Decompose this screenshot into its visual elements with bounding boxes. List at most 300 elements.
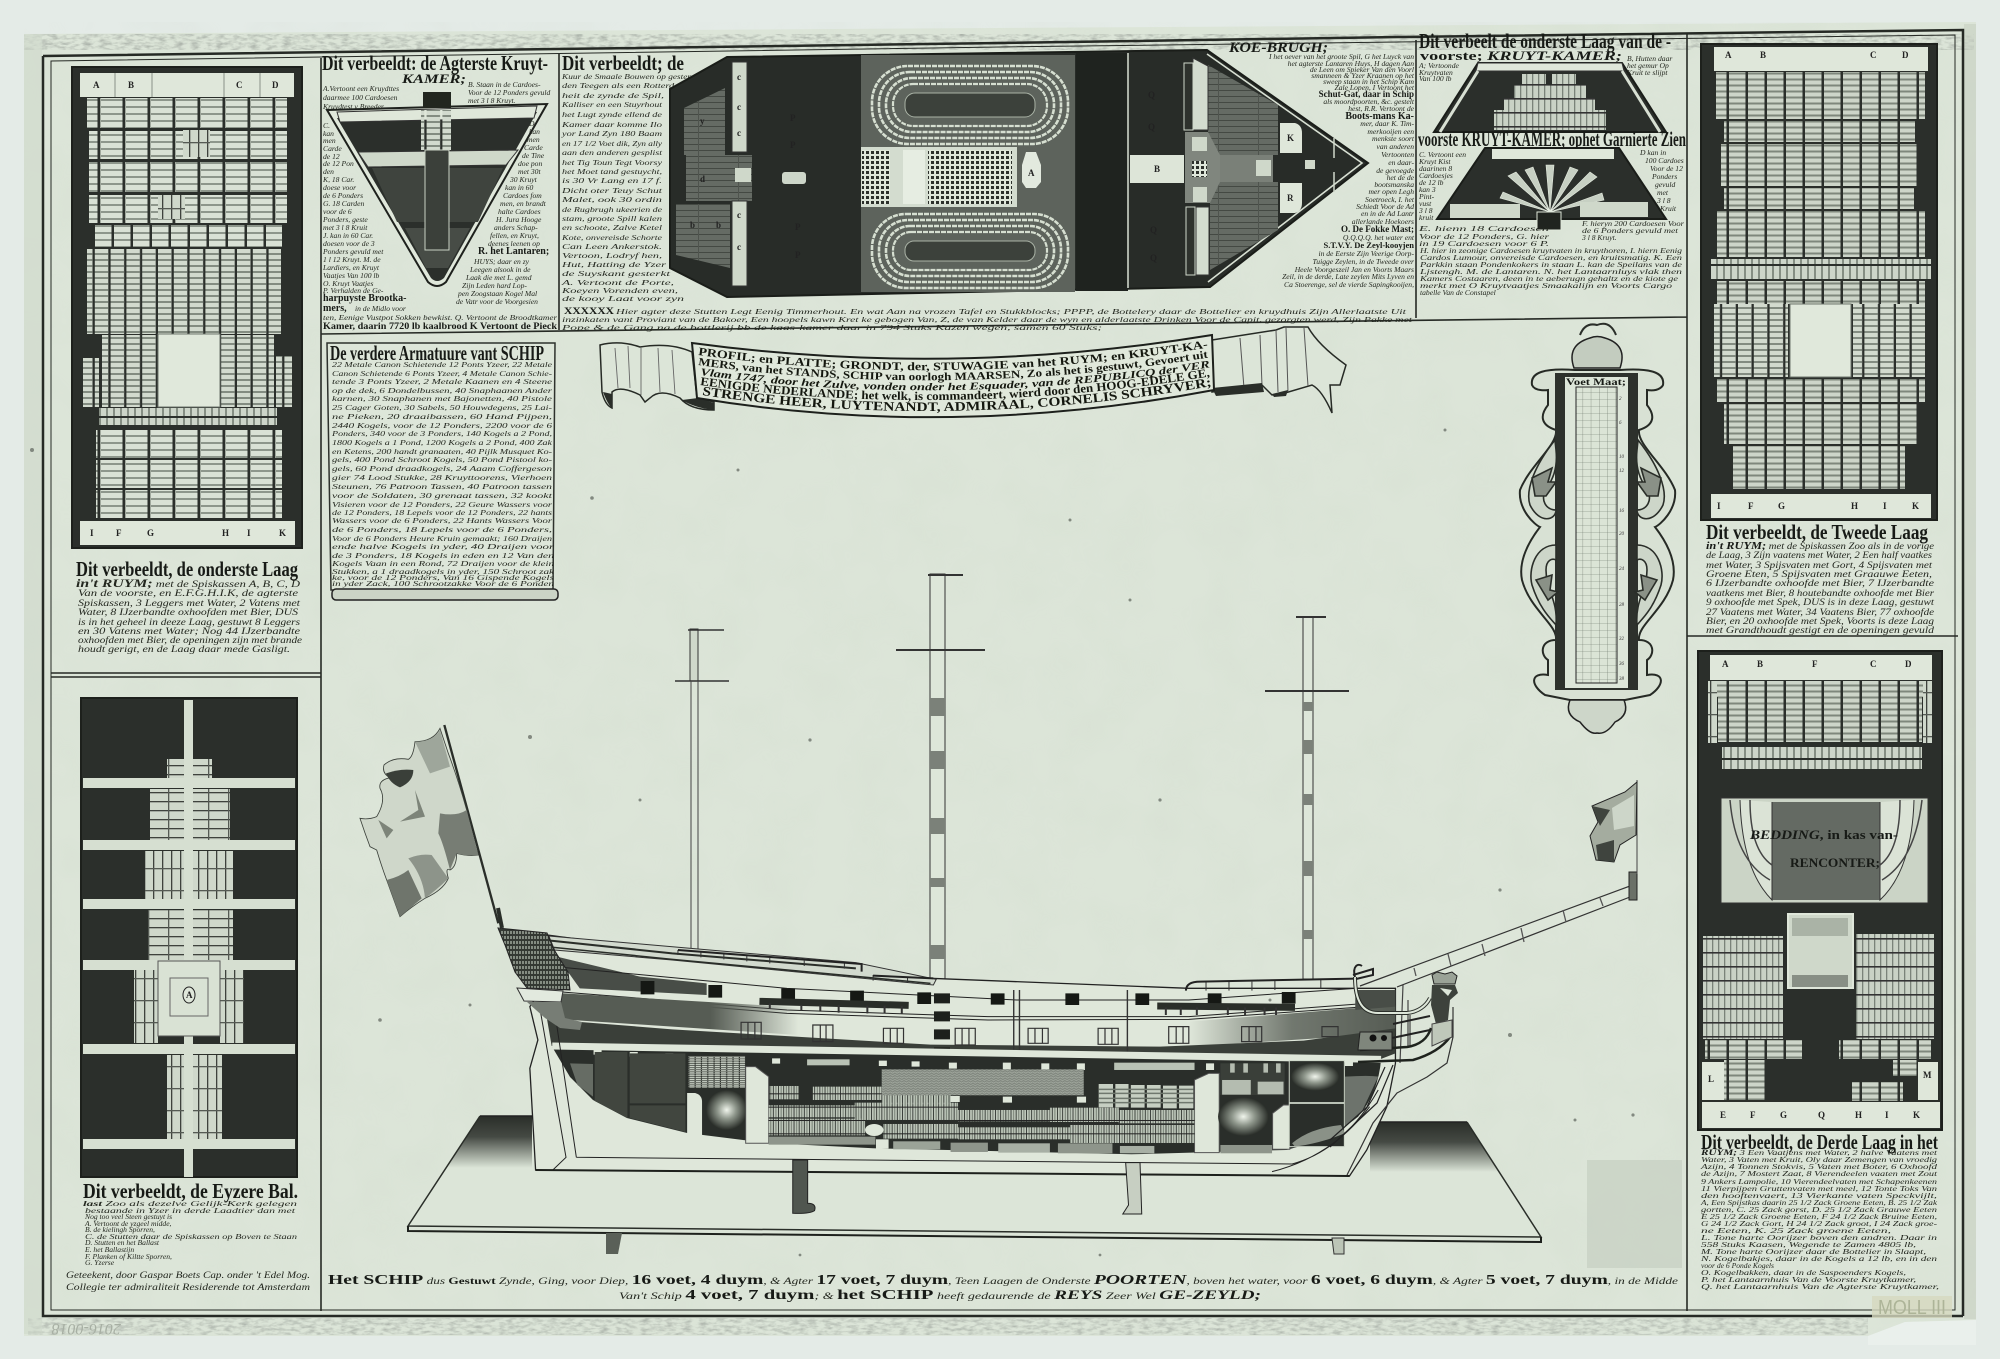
heading and text: Koe-brugh: Q.Q.Q.Q. het water ent	[1343, 233, 1415, 242]
header casks	[1710, 655, 1932, 680]
cross beams	[83, 783, 295, 1144]
left column text: met 3 l 8 Kruit	[323, 223, 368, 232]
ballast stones	[134, 759, 244, 1143]
left column text: mers,	[323, 303, 347, 314]
text block: lower layer caption: is in het geheel in deeze Laag, gestuwt 8 Leggers	[78, 618, 300, 628]
panel: further text under hull plan intro: de Rugbrugh ukeerien de	[562, 205, 663, 214]
text block: second layer caption: 6 IJzerbandte oxhoofde met Bier, 7 IJzerbandte	[1706, 578, 1934, 589]
mast partner ladder	[934, 993, 950, 1057]
left scroll fold	[600, 343, 714, 410]
left column text: de 12	[323, 152, 340, 161]
text block: lower layer caption: Dit verbeeldt, de onderste Laag	[76, 557, 298, 581]
text block: notes below hull plan: XXXXXX	[564, 306, 615, 316]
text block: third layer caption: de Azijn, 7 Mostert Zaat, 8 Vierendeelen vaaten met Zout	[1701, 1169, 1938, 1178]
footer casks: F	[1748, 501, 1754, 511]
text block: lower layer caption: Spiskassen, 3 Leggers met Water, 2 Vatens met	[78, 599, 300, 609]
chain plates	[770, 1003, 1276, 1015]
scale numbers: 28	[1619, 603, 1624, 608]
text block: third layer caption: N. Kogelbakjes, daar in de Kogels a 12 lb, en in den	[1700, 1254, 1937, 1263]
signature: Geteekent, door Gaspar Boets Cap. onder 't Edel Mog.	[66, 1271, 310, 1281]
panel: further text under hull plan intro: Kamer daar komme Ilo	[561, 120, 662, 129]
hull section diagram	[327, 92, 547, 286]
footer casks: F	[1750, 1110, 1756, 1120]
text block: second layer caption: 27 Vaatens met Water, 34 Vaatens Bier, 77 oxhoofde	[1706, 607, 1934, 618]
footer casks: I	[90, 528, 94, 538]
powder room notes: Pint-	[1418, 192, 1435, 201]
torn corner	[1868, 1320, 1976, 1345]
footer casks: I	[247, 528, 251, 538]
text block: third layer caption: 9 Ankers Lampolie, 10 Vierendeelvaten met Schapenkeenen	[1701, 1177, 1937, 1186]
text block: notes below hull plan: Pope & de Gang na de bottlerij bb de kaas-kamer daar in 794 Stuks Kazen wegen, samen 60 Stuks;	[560, 323, 1103, 332]
left column text: men	[323, 136, 336, 145]
left column text: P. Verhalden de Ge-	[322, 286, 384, 295]
powder room notes: Cardoesjes	[1419, 171, 1453, 180]
left column text: doese voor	[323, 183, 356, 192]
right column text: men, en brandt	[500, 199, 547, 208]
ribbon title lines: STRENGE HEER, LUYTENANDT, ADMIRAAL, CORNELIS SCHRYVER;	[702, 379, 1210, 413]
header casks: D	[272, 80, 279, 90]
text block: second layer caption	[1706, 520, 1934, 636]
panel: further text under hull plan intro: Dit verbeeldt; de	[562, 51, 684, 75]
left column text: Ponders, geste	[322, 215, 368, 224]
right column text: doe pon	[518, 159, 542, 168]
right column text: de Vatr voor de Voorgesien	[456, 297, 538, 306]
fore mast	[1265, 617, 1349, 979]
text block: second layer caption: Groene Eten, 5 Spijsvaten met Graauwe Eeten,	[1706, 570, 1932, 580]
stern cabins: c	[737, 72, 741, 82]
left column text	[322, 121, 406, 314]
ribbon title lines: Vlam 1747, door het Zulve, vonden onder het Esquader, van de REPUBLICQ der VER	[702, 361, 1210, 392]
panel: further text under hull plan intro: Malet, ook 30 ordin	[560, 195, 662, 204]
panel: further text under hull plan intro: Can Leen Ankerstok.	[562, 242, 662, 251]
stern stores	[570, 1052, 745, 1135]
heading and text: Koe-brugh: Boots-mans Ka-	[1345, 111, 1414, 122]
stern cabins: b	[690, 220, 695, 230]
text block: notes below hull plan	[560, 306, 1413, 332]
heading and text: Koe-brugh: hest, R.R. Vertoont de	[1348, 104, 1415, 113]
heading and text: Koe-brugh: Schiedt Voor de Ad	[1356, 202, 1414, 211]
provision casks	[1703, 934, 1934, 1101]
heading	[1419, 29, 1671, 63]
bedding curtain	[1721, 798, 1928, 903]
heading and text: Koe-brugh: de gevoegde	[1376, 166, 1415, 175]
right column text: Laak die met L. gemd	[465, 273, 532, 282]
footer casks: G	[1778, 501, 1785, 511]
panel: further text under hull plan intro: stam, groote Spill kalen	[562, 214, 662, 223]
header casks: D	[1905, 659, 1912, 669]
hull wood section	[530, 935, 1395, 1176]
lower hull shading	[547, 993, 798, 1035]
left column text: doesen voor de 3	[323, 239, 375, 248]
central hatch band: A	[1028, 168, 1035, 178]
heading: voorste; KRUYT-KAMER;	[1420, 48, 1622, 63]
heading and text: Koe-brugh: Soetroeck, I. het	[1365, 195, 1415, 204]
text block: iron ballast caption: E. het Ballastijn	[84, 1245, 134, 1254]
scroll roller	[332, 589, 558, 600]
left column text: Lardiers, en Kruyt	[322, 263, 380, 272]
forward cabins: R	[1287, 193, 1294, 203]
text block: third layer caption	[1699, 1130, 1939, 1291]
panel: further text under hull plan intro: aan den anderen gesplist	[562, 148, 663, 157]
powder room notes: Voor de 12 Ponders, G. hier	[1419, 232, 1549, 241]
text block: iron ballast caption: bestaande in Yzer in derde Laadtier dan met	[85, 1206, 296, 1215]
powder room notes: vust	[1419, 199, 1432, 208]
heading and text: Koe-brugh: O. De Fokke Mast;	[1341, 224, 1414, 234]
store boxes	[1702, 1062, 1938, 1100]
forward dark hold: Q	[1150, 225, 1157, 235]
text block: notes below hull plan: Hier agter deze Stutten Legt Eenig Timmerhout. En wat Aan na vrozen Tafel en Stukkblocks; PPPP, de Bottelery daar de Bottelier en kruydhuis Zijn Allerlaatste Uit	[614, 307, 1407, 316]
panel: further text under hull plan intro: Dicht oter Teuy Schut	[560, 186, 663, 195]
beams bottom	[951, 1096, 1086, 1103]
text block: lower layer caption: en 30 Vatens met Water; Nog 44 IJzerbandte	[78, 627, 300, 637]
panel: further text under hull plan intro: en schoote, Zalve Ketel	[562, 223, 662, 232]
cask tier	[1099, 1084, 1193, 1108]
scroll text: 2440 Kogels, voor de 12 Ponders, 2200 voor de 6	[332, 421, 552, 430]
scroll text: 25 Cager Goten, 30 Sabels, 50 Houwdegens, 25 Lai-	[332, 403, 553, 412]
dark hold with pumps: P	[790, 113, 796, 123]
panel: forward powder room	[1417, 29, 1686, 297]
heading and text: Koe-brugh: als moordpoorten, &c. gestelt	[1323, 97, 1415, 106]
store boxes: M	[1923, 1070, 1932, 1080]
central hatch	[158, 334, 220, 407]
header casks: A	[1722, 659, 1729, 669]
panel: further text under hull plan intro: Koeyen Vorenden even,	[560, 286, 678, 295]
footer casks: H	[1851, 501, 1858, 511]
header casks: B	[128, 80, 134, 90]
panel: further text under hull plan intro: het Moet tand gestuycht,	[562, 167, 662, 176]
mast step: A	[186, 990, 193, 1000]
footer casks: I	[1883, 501, 1887, 511]
right column text: halte Cardoes	[498, 207, 541, 216]
text block: notes below hull plan: inzinkaten vant Proviant van de Bakoer, Een hoopels kawn Kret ke gebogen Van, Z, de van Kelder daar de wyn en alderlaatste Drinken Voor de Capit. gezorgten werd, Zijn Pakke met	[562, 315, 1413, 324]
heading and text: Koe-brugh: en in de Ad Lantr	[1361, 209, 1414, 218]
forward dark hold: Q	[1150, 253, 1157, 263]
powder room notes: Kamers Costaaren, deen in te aeberugn gehaltz en de kiote ge	[1419, 274, 1679, 283]
powder kegs trapezoid	[1434, 63, 1666, 132]
right column text: Cardoes fom	[503, 191, 542, 200]
left column text: de 12 Pon	[323, 159, 354, 168]
scale numbers: 2	[1619, 397, 1622, 402]
heading and text: Koe-brugh: Vertoonten	[1381, 150, 1414, 159]
bottom caption line 1: Het SCHIP dus Gestuwt Zynde, Ging, voor Diep, 16 voet, 4 duym , & Agter 17 voet, 7 duym , Teen Laagen de Onderste POORTEN , boven het water, voor 6 voet, 6 duym , & Agter 5 voet, 7 duym , in de Midde	[328, 1273, 1678, 1288]
right column text: H. Jura Hooge	[495, 215, 542, 224]
ribbon body	[692, 335, 1214, 417]
ship bow and figurehead	[1330, 780, 1637, 1175]
bow flag	[1590, 782, 1637, 862]
left column text: den	[323, 167, 334, 176]
text block: lower layer caption	[76, 557, 302, 655]
footer casks: H	[222, 528, 229, 538]
heading: Dit verbeelt de onderste Laag van de -	[1419, 29, 1671, 53]
powder room notes: Voor de 12	[1650, 164, 1683, 173]
mast step	[158, 961, 220, 1036]
scroll text: Stukken, a 1 draadkogels in yder, 150 Schroot zak	[332, 567, 555, 576]
subheading: voorste KRUYT-KAMER; ophet Garnierte Zien	[1418, 127, 1686, 151]
panel: further text under hull plan intro: yor Land Zyn 180 Baam	[561, 129, 663, 138]
panel: further text under hull plan intro: het Tig Toun Tegt Voorsy	[562, 158, 663, 167]
forward cabins	[1184, 58, 1334, 275]
powder room notes: de 6 Ponders gevuld met	[1582, 226, 1679, 235]
text block: second layer caption: met Water, 3 Spijsvaten met Gort, 4 Spijsvaten met	[1706, 561, 1932, 571]
panel: further text under hull plan intro: Kalliser en een Stuyrhout	[561, 100, 663, 109]
deck lanterns	[741, 1022, 1338, 1045]
text block: iron ballast caption: G. Yzerse	[85, 1258, 115, 1267]
scale numbers: 6	[1619, 421, 1622, 426]
scale numbers: 10	[1619, 455, 1624, 460]
header casks: C	[1870, 50, 1876, 60]
powder room notes: de 12 lb	[1419, 178, 1444, 187]
scale numbers: 36	[1619, 662, 1624, 667]
scroll text: gels, 400 Pond Schroot Kogels, 50 Pond Pistool ko-	[332, 455, 553, 464]
side labels: Kruytvaten	[1418, 68, 1453, 77]
powder room notes: 3 l 8 Kruyt.	[1581, 233, 1617, 242]
ship hull cutaway	[530, 935, 1395, 1214]
powder room notes: H. hier in zeonige Cardoesen kruytvaten in kruythoren, I. hiern Eenig	[1419, 246, 1682, 255]
powder room notes: C. Vertoont een	[1419, 150, 1466, 159]
text block: third layer caption: P. het Lantaarnhuis Van de Voorste Kruytkamer,	[1700, 1275, 1916, 1284]
heading and text: Koe-brugh: smanneen & Yzer Kraanen op het	[1311, 71, 1415, 80]
bedding curtain: BEDDING , in kas van-	[1749, 827, 1898, 842]
heading: Dit verbeeldt: de Agterste Kruyt-	[322, 51, 548, 75]
heading and text: Koe-brugh: en daar-	[1388, 158, 1414, 167]
powder room notes: Ljstengh. M. de Lantaren. N. het Lantaarnluys vlak then	[1418, 267, 1682, 276]
upper bow strake	[1355, 990, 1395, 1010]
scale numbers: 12	[1619, 469, 1624, 474]
paper specks	[30, 428, 1635, 1256]
panel: iron ballast	[81, 698, 297, 1177]
scale heading: Voet Maat;	[1566, 378, 1626, 388]
top shell	[1572, 336, 1622, 368]
scroll text: voor de Soldaten, 30 grenaat tassen, 32 kookt	[332, 491, 553, 500]
cradle legs	[793, 1160, 815, 1213]
text block: second layer caption: Dit verbeeldt, de Tweede Laag	[1706, 520, 1928, 544]
powder room notes: Parkkin staan Pondenkokers in staan L. kan de Speilans van de	[1419, 260, 1683, 269]
bow timbers	[1330, 1065, 1393, 1147]
text block: lower layer caption: in't RUYM; met de Spiskassen A, B, C, D	[76, 576, 300, 590]
powder room with lantern	[1437, 148, 1666, 230]
armature scroll	[327, 341, 558, 600]
powder room notes: F. hieryn 200 Cardoesen Voor	[1581, 219, 1684, 228]
forward lanterns	[1218, 1061, 1344, 1136]
powder room notes: D kan in	[1639, 148, 1666, 157]
forward dark hold: Q	[1148, 122, 1155, 132]
footer casks	[80, 521, 295, 545]
header casks: B	[1760, 50, 1766, 60]
panel: further text under hull plan intro: de Suyskant gesterkt	[562, 269, 672, 278]
left column text: K, 18 Car.	[322, 175, 354, 184]
lines of the sheer	[555, 967, 1390, 1020]
forward dark hold	[1076, 53, 1184, 291]
ribbon title lines: MERS, van het STANDS, SCHIP van oorlogh MAARSEN, Zo als het is gestuwt, Gevoert uit	[698, 351, 1208, 382]
header casks: C	[236, 80, 242, 90]
scale panel	[1565, 377, 1628, 688]
barrels	[83, 98, 292, 518]
footer casks: Q	[1818, 1110, 1825, 1120]
stern cabins	[676, 62, 752, 286]
scroll text: Visieren voor de 12 Ponders, 22 Geure Wassers voor	[332, 500, 552, 509]
bottom caption line 2: Van't Schip 4 voet, 7 duym ; & het SCHIP heeft gedaurende de REYS Zeer Wel GE-ZEYLD;	[619, 1287, 1261, 1303]
dark frame	[1555, 373, 1638, 690]
signature	[66, 1271, 310, 1293]
scroll text: ke, voor de 12 Ponders, Van 16 Gispende Kogels	[332, 573, 554, 582]
heading and text: Koe-brugh: bootsmanska	[1374, 180, 1414, 189]
right column text: met 30t	[518, 167, 541, 176]
right column text: kan in 60	[505, 183, 533, 192]
heading	[322, 51, 548, 86]
text block: second layer caption: vaatkens met Bier, 8 houtebandte oxhoofde met Bier	[1706, 588, 1934, 599]
barrels	[1711, 72, 1931, 489]
right column text: R. het Lantaren;	[478, 246, 549, 257]
heading and text: Koe-brugh: in de Eerste Zijn Veerige Oorp-	[1318, 249, 1414, 258]
stem and cutwater	[1347, 1007, 1453, 1175]
bottom shell	[1568, 700, 1626, 733]
panel: aft powder room	[322, 51, 557, 331]
platform legs	[606, 1233, 622, 1254]
powder room notes: daarinen 8	[1419, 164, 1452, 173]
panel: further text under hull plan intro: is 30 Vr Lang en 17 f.	[562, 176, 662, 185]
figurehead	[1431, 972, 1458, 1046]
panel: further text under hull plan intro: Kote, onvereisde Schorte	[561, 233, 663, 242]
panel: further text under hull plan intro	[560, 51, 692, 303]
heading: KAMER;	[401, 71, 466, 86]
scroll text: de 6 Ponders, 18 Lepels voor de 6 Ponders,	[332, 525, 552, 534]
scale numbers	[1619, 397, 1624, 682]
powder room notes: Kruit	[1659, 204, 1677, 213]
right column text	[456, 119, 549, 306]
barrels	[1708, 681, 1932, 769]
right column text: pen Zoogstaan Kogel Mal	[457, 289, 537, 298]
powder room notes: Ponders	[1651, 172, 1677, 181]
text block: second layer caption: met Grandthoudt gestigt en de openingen gevuld	[1706, 626, 1934, 636]
text block: third layer caption: M. Tone harte Oorijzer daar de Bottelier in Slaapt,	[1700, 1247, 1926, 1256]
ribbon title lines: PROFIL; en PLATTE; GRONDT, der, STUWAGIE van het RUYM; en KRUYT-KA-	[698, 342, 1208, 372]
left column text: C.	[323, 121, 330, 130]
powder room notes: E. hienn 18 Cardoesen	[1417, 224, 1549, 233]
coiled cable lower	[872, 214, 1068, 288]
lower stores	[769, 1137, 1272, 1153]
bottom text: ten, Eenige Vustpot Sokken bewkist. Q. Vertoont de Broodtkamer	[323, 313, 557, 322]
heading and text: Koe-brugh: sweep staan in het Schip Kam	[1323, 77, 1415, 86]
left column text: J. kan in 60 Car.	[323, 231, 373, 240]
collection stamp: MOLL III	[1878, 1297, 1946, 1319]
centre chest	[1788, 914, 1853, 988]
keel lines	[540, 1010, 1378, 1172]
text block: third layer caption: ne Eeten, K. 25 Zack groene Eeten,	[1701, 1226, 1891, 1235]
room labels top: A.Vertoont een Kruydttes	[322, 84, 399, 93]
forward dark hold: Q	[1148, 90, 1155, 100]
stern cabins: c	[737, 102, 741, 112]
stern carving	[498, 908, 582, 1030]
heading and text: Koe-brugh: Tuigge Zeylen, in de Tweede over	[1312, 257, 1414, 266]
scale numbers: 20	[1619, 532, 1624, 537]
stern cabins: c	[737, 128, 741, 138]
scroll text: 1800 Kogels a 1 Pond, 1200 Kogels a 2 Pond, 400 Zak	[332, 438, 553, 447]
stern flag	[360, 725, 498, 923]
side labels: Van 100 lb	[1419, 74, 1452, 83]
scroll heading: De verdere Armatuure vant SCHIP	[330, 341, 544, 365]
right column text: deenes leenen op	[488, 239, 540, 248]
panel: further text under hull plan intro: het Lugt zynde ellend de	[562, 110, 663, 119]
bedding curtain: RENCONTER;	[1790, 855, 1880, 870]
header casks: C	[1870, 659, 1876, 669]
header casks: A	[1725, 50, 1732, 60]
left column text: 1 l 12 Kruyt. M. de	[323, 255, 381, 264]
text block: second layer caption: de Laag, 3 Zijn vaatens met Water, 2 Een half vaatkes	[1706, 550, 1932, 561]
aft lantern room	[706, 1090, 747, 1130]
ship: masts and rigging	[675, 574, 1349, 984]
panel: further text under hull plan intro: en 17 1/2 Voet dik, Zyn ally	[562, 139, 663, 148]
footer casks: I	[1885, 1110, 1889, 1120]
panel: lower layer of hold (left)	[72, 67, 302, 548]
heading and text: Koe-brugh	[1228, 40, 1415, 289]
heading and text: Koe-brugh: menkste soort	[1372, 134, 1415, 143]
right scroll fold	[1212, 327, 1346, 413]
ribbon title lines	[698, 342, 1210, 413]
heading and text: Koe-brugh: Heele Voorgeszeil Jan en Voorts Maars	[1294, 265, 1414, 274]
foot scale cartouche	[1520, 324, 1675, 733]
dark hold with pumps	[782, 113, 806, 260]
right column text: men	[527, 135, 540, 144]
text block: lower layer caption: Van de voorste, en E.F.G.H.I.K, de agterste	[78, 589, 298, 599]
scroll text: Voor de 6 Ponders Heure Kruin gemaakt; 160 Draijen	[332, 534, 552, 543]
powder room notes: 3 l 8	[1656, 196, 1671, 205]
scroll text: de 3 Ponders, 18 Kogels in eden en 12 Van den	[332, 551, 554, 560]
heading and text: Koe-brugh: van anderen	[1377, 142, 1414, 151]
header casks	[80, 73, 294, 97]
footer casks: K	[1912, 501, 1919, 511]
scale numbers: 32	[1619, 637, 1624, 642]
heading and text: Koe-brugh: S.T.V.Y. De Zeyl-kooyjen	[1323, 240, 1414, 250]
upper gunwale dark strakes	[549, 936, 1355, 995]
left column text: Ponders gevuld met	[322, 247, 384, 256]
central gun deck	[861, 55, 1075, 292]
side labels: B, Hutten daar	[1627, 54, 1672, 63]
dark hold with pumps: P	[795, 222, 801, 232]
panel: third layer of hold (right lower)	[1698, 651, 1942, 1130]
header casks	[1714, 47, 1928, 71]
left column text: harpuyste Brootka-	[323, 293, 406, 304]
heading and text: Koe-brugh: Ca Stoerenge, sel de vierde Sapingkooijen,	[1284, 280, 1414, 289]
powder room notes: met	[1657, 188, 1669, 197]
text block: third layer caption: den hooftenvaert, 13 Vierkante vaten Speckvijlt,	[1701, 1191, 1937, 1200]
heading and text: Koe-brugh: Zale Lopen, I Vertoont het	[1334, 83, 1415, 92]
room labels top: daarmee 100 Cardoesen	[323, 93, 398, 102]
main mast	[896, 574, 985, 984]
right column text: anders Schap-	[494, 223, 538, 232]
scroll text: gier 74 Lood Stukke, 28 Kruyttoorens, Vierhoen	[332, 473, 552, 482]
room labels top: met 3 l 8 Kruyt.	[468, 96, 516, 105]
heading and text: Koe-brugh: de Leen om Spieker Van den Voorl	[1310, 65, 1414, 74]
scroll text: en Ketens, 200 handt granaaten, 40 Pijlk Musquet Ko-	[332, 447, 553, 456]
text block: third layer caption: G 24 1/2 Zack Gort, H 24 1/2 Zack groot, I 24 Zack groe-	[1701, 1219, 1938, 1228]
heading and text: Koe-brugh: Schut-Gat, daar in Schip	[1319, 89, 1414, 99]
text block: iron ballast caption	[66, 1179, 310, 1293]
keelson	[184, 700, 193, 1177]
store boxes: L	[1708, 1074, 1714, 1084]
right column text: 30 Kruyt	[509, 175, 538, 184]
hanging ornament	[1580, 324, 1616, 335]
text block: iron ballast caption: A. Vertoont de yzgeel midde,	[84, 1219, 172, 1228]
scroll text: in yder Zack, 100 Schrootzakke Voor de 6 Ponden	[332, 579, 554, 588]
text block: second layer caption: 9 oxhoofde met Spek, DUS is in deze Laag, gestuwt	[1706, 597, 1934, 608]
scroll text: Canon Schietende 6 Ponts Yzeer, 4 Metale Canon Schie-	[332, 369, 553, 378]
panel: second layer of hold (right)	[1701, 44, 1937, 520]
heading and text: Koe-brugh: KOE-BRUGH;	[1228, 40, 1328, 56]
side labels: A; Vertoonde	[1418, 61, 1459, 70]
text block: third layer caption: Q. het Lantaarnhuis Van de Agterste Kruytkamer,	[1701, 1282, 1939, 1291]
powder room notes: in 19 Cardoesen voor 6 P.	[1419, 239, 1549, 248]
text block: third layer caption: Water, 3 Vaten met Kruit, Oly daar Zemengen van vroedig	[1701, 1155, 1937, 1164]
